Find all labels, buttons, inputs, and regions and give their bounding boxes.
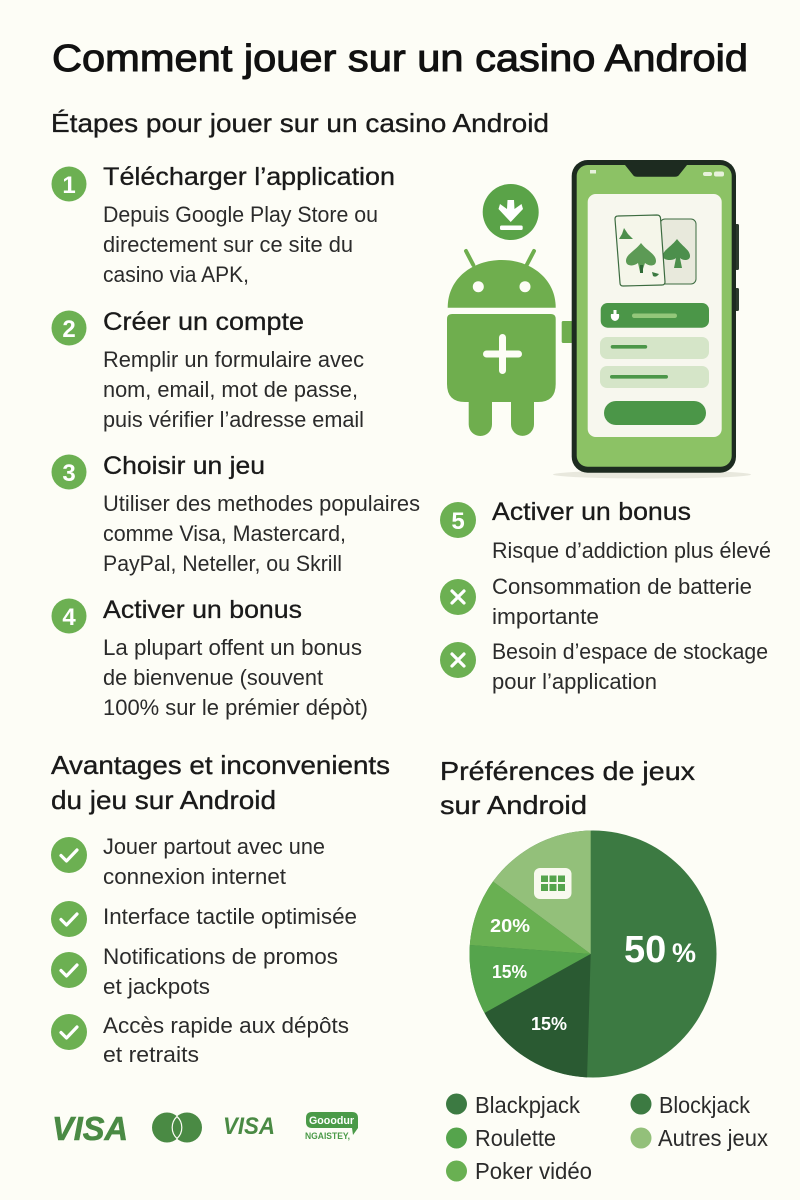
- screen bars: [600, 303, 709, 425]
- icon: game grid: [534, 868, 572, 899]
- heading: pros and cons: Avantages et inconvenients: [51, 750, 390, 780]
- drawback: storage: Besoin d’espace de stockage: [492, 639, 768, 664]
- illustration: android robot: [447, 251, 573, 436]
- title: Comment jouer sur un casino Android: [52, 38, 748, 80]
- drawback: battery: importante: [492, 604, 599, 629]
- advantage 1: [51, 834, 325, 889]
- payment logos: VISA: [52, 1110, 128, 1147]
- drawback: battery: Consommation de batterie: [492, 574, 752, 599]
- playing cards: [615, 215, 696, 286]
- advantage 3: et jackpots: [103, 974, 210, 999]
- payment logos: VISA: [223, 1113, 275, 1140]
- step 1: directement sur ce site du: [103, 232, 353, 257]
- step 3: 3: [62, 460, 76, 487]
- step 2: puis vérifier l’adresse email: [103, 407, 364, 432]
- legend: Roulette: [475, 1125, 556, 1151]
- step 5: Risque d’addiction plus élevé: [492, 538, 771, 563]
- step 1: Télécharger l’application: [103, 163, 395, 191]
- advantage 4: Accès rapide aux dépôts: [103, 1013, 349, 1038]
- advantage 4: [51, 1013, 349, 1067]
- phone screen card: [588, 194, 722, 437]
- pie chart: %: [672, 938, 696, 968]
- legend: Blockjack: [659, 1092, 750, 1118]
- pie chart: [470, 830, 716, 1078]
- payment logos: Gooodur: [309, 1115, 355, 1127]
- step 4: [52, 596, 368, 720]
- heading: steps: Étapes pour jouer sur un casino Android: [51, 108, 549, 138]
- advantage 3: [51, 944, 338, 999]
- legend: Poker vidéo: [475, 1158, 592, 1184]
- pie chart: 50: [624, 929, 666, 971]
- step 3: Choisir un jeu: [103, 452, 265, 480]
- pie chart: 15%: [531, 1013, 567, 1034]
- illustration: phone: [553, 160, 751, 478]
- step 2: 2: [62, 316, 76, 343]
- step 5: 5: [451, 508, 465, 535]
- advantage 4: et retraits: [103, 1042, 199, 1067]
- step 3: comme Visa, Mastercard,: [103, 521, 346, 546]
- step 1: [52, 163, 395, 287]
- drawback: storage: pour l’application: [492, 669, 657, 694]
- step 4: 4: [62, 604, 76, 631]
- step 5: [440, 498, 771, 563]
- advantage 1: Jouer partout avec une: [103, 834, 325, 859]
- step 5: Activer un bonus: [492, 498, 691, 526]
- step 4: 100% sur le prémier dépòt): [103, 695, 368, 720]
- step 1: casino via APK,: [103, 262, 249, 287]
- step 4: Activer un bonus: [103, 596, 302, 624]
- step 1: 1: [62, 172, 76, 199]
- advantage 1: connexion internet: [103, 864, 286, 889]
- payment logos: [52, 1110, 358, 1147]
- illustration: download badge: [483, 184, 539, 240]
- legend: Blackpjack: [475, 1092, 580, 1118]
- heading: pros and cons: [51, 750, 390, 815]
- heading: game preferences: sur Android: [440, 790, 587, 820]
- advantage 3: Notifications de promos: [103, 944, 338, 969]
- step 2: Remplir un formulaire avec: [103, 347, 364, 372]
- step 2: nom, email, mot de passe,: [103, 377, 358, 402]
- step 1: Depuis Google Play Store ou: [103, 202, 378, 227]
- drawback: storage: [440, 639, 768, 694]
- legend: [446, 1092, 768, 1184]
- heading: game preferences: Préférences de jeux: [440, 756, 695, 786]
- pie chart: 15%: [492, 961, 527, 982]
- step 4: de bienvenue (souvent: [103, 665, 323, 690]
- advantage 2: [51, 901, 357, 937]
- step 4: La plupart offent un bonus: [103, 635, 362, 660]
- heading: pros and cons: du jeu sur Android: [51, 785, 276, 815]
- heading: game preferences: [440, 756, 695, 820]
- pie chart: 20%: [490, 915, 530, 936]
- payment logos: NGAISTEY,: [305, 1131, 350, 1141]
- step 2: [52, 308, 364, 432]
- step 2: Créer un compte: [103, 308, 304, 336]
- advantage 2: Interface tactile optimisée: [103, 904, 357, 929]
- step 3: Utiliser des methodes populaires: [103, 491, 420, 516]
- drawback: battery: [440, 574, 752, 629]
- legend: Autres jeux: [658, 1125, 768, 1151]
- step 3: [52, 452, 420, 576]
- step 3: PayPal, Neteller, ou Skrill: [103, 551, 342, 576]
